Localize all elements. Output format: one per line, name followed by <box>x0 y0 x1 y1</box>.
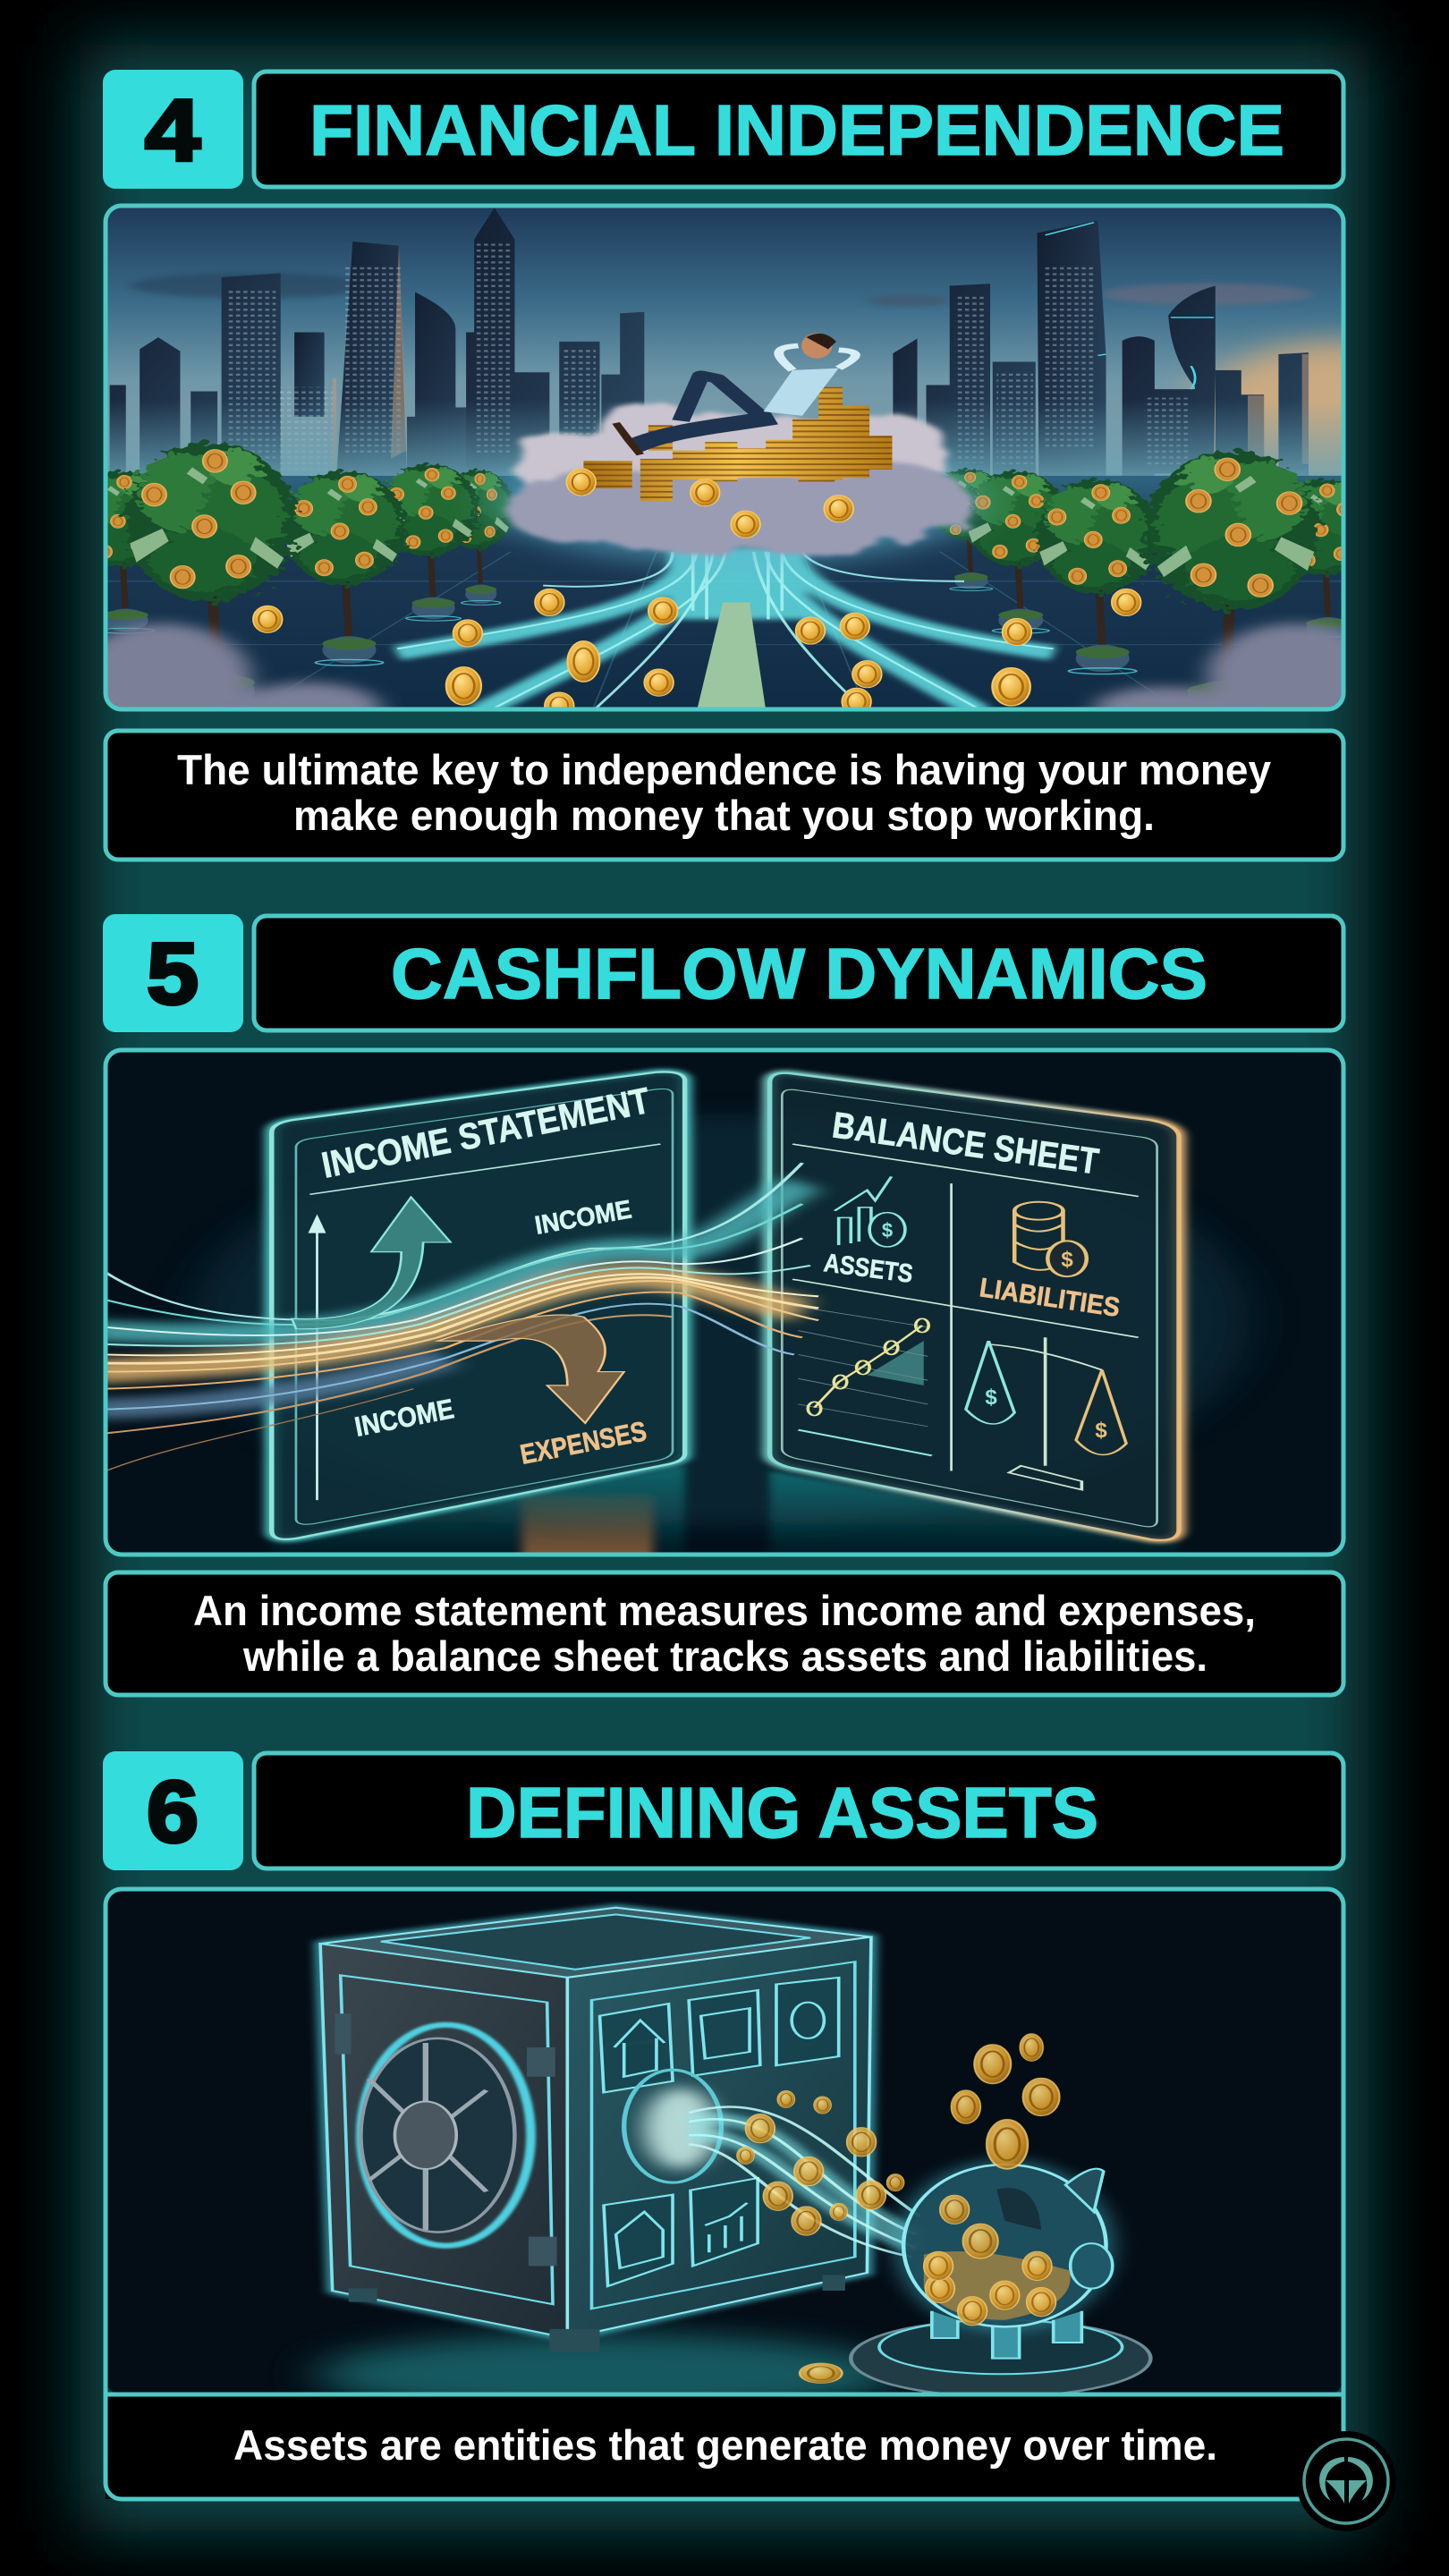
cloud coins <box>566 469 853 538</box>
illustration: transparent safe feeding a piggy bank <box>106 1889 1343 2415</box>
section 4: financial independence <box>71 70 1449 860</box>
backdrop glow <box>195 1115 1248 1526</box>
illustration: income statement and balance sheet panels <box>89 1050 1343 1556</box>
caption: section 4: The ultimate key to independence is having your money <box>177 746 1271 793</box>
platform <box>851 2320 1150 2396</box>
warm building edges <box>333 246 1309 476</box>
caption: section 4 <box>106 731 1343 860</box>
frame: illustration border <box>106 1050 1343 1555</box>
caption: section 6: Assets are entities that generate money over time. <box>233 2421 1217 2469</box>
cloud <box>495 402 980 564</box>
icon: house <box>600 2004 673 2092</box>
icon: assets chart with coin <box>835 1176 905 1247</box>
sky <box>89 201 1449 527</box>
heading: defining assets: DEFINING ASSETS <box>466 1773 1098 1852</box>
dollar bill stream <box>697 602 766 710</box>
city skyline <box>110 208 1309 480</box>
icon: certificate <box>689 1990 760 2076</box>
line chart <box>798 1307 932 1455</box>
caption: section 5: while a balance sheet tracks assets and liabilities. <box>242 1632 1208 1680</box>
panel: income statement <box>272 1072 685 1539</box>
safe door wheel <box>360 2025 531 2246</box>
corner clouds <box>107 616 1342 707</box>
label: income upper: INCOME <box>533 1195 634 1241</box>
money trees <box>71 442 1376 722</box>
label: expenses: EXPENSES <box>518 1415 649 1470</box>
heading: cashflow dynamics: CASHFLOW DYNAMICS <box>391 934 1208 1013</box>
heading: defining assets <box>254 1753 1343 1868</box>
number badge 6 <box>103 1751 243 1870</box>
arrow: income up <box>292 1197 451 1329</box>
number badge 5 <box>103 914 243 1032</box>
label: liabilities: LIABILITIES <box>978 1273 1122 1323</box>
neon accents <box>1046 223 1214 389</box>
caption: section 5: An income statement measures income and expenses, <box>193 1587 1256 1634</box>
relaxing man <box>616 333 855 454</box>
floor glow <box>317 2334 900 2415</box>
dollar sign: assets coin: $ <box>882 1219 893 1241</box>
glowing money streams <box>397 547 1054 712</box>
panel: balance sheet <box>770 1073 1179 1540</box>
ground coins <box>253 589 1140 719</box>
safe <box>320 1908 871 2351</box>
dollar sign: left scale pan: $ <box>985 1385 997 1410</box>
gold coin stacks <box>583 387 892 501</box>
horizon haze <box>107 407 1342 476</box>
dollar sign: right scale pan: $ <box>1095 1419 1107 1443</box>
number badge 5: 5 <box>147 925 199 1022</box>
flowing coins <box>737 2090 904 2235</box>
logo badge <box>1296 2431 1396 2531</box>
heading: financial independence: FINANCIAL INDEPENDENCE <box>309 90 1284 170</box>
flowing cashflow ribbons <box>89 1163 818 1471</box>
caption: section 6 <box>106 2394 1343 2499</box>
frame: illustration and caption border <box>106 1889 1343 2499</box>
floor reflection <box>272 1466 1179 1556</box>
icon: growth chart <box>691 2178 758 2266</box>
energy flow from safe to piggy bank <box>624 2070 919 2257</box>
falling coins <box>800 2034 1059 2384</box>
section 6: defining assets <box>103 1751 1343 2499</box>
icon: liabilities coins <box>1014 1202 1087 1276</box>
label: balance sheet: BALANCE SHEET <box>830 1104 1101 1182</box>
number badge 6: 6 <box>147 1763 199 1860</box>
icon: balance scale <box>966 1337 1126 1490</box>
icon: money house <box>604 2195 673 2286</box>
caption: section 5 <box>106 1572 1343 1695</box>
illustration: man relaxing on a cloud above money trees <box>71 201 1449 733</box>
heading: financial independence <box>254 72 1343 187</box>
city lit windows <box>227 243 1191 476</box>
frame: illustration border <box>106 206 1343 709</box>
caption: section 4: make enough money that you stop working. <box>293 792 1155 839</box>
label: assets: ASSETS <box>822 1249 914 1289</box>
section 5: cashflow dynamics <box>89 914 1343 1695</box>
icon: light bulb <box>776 1978 839 2065</box>
dollar sign: liabilities coin: $ <box>1061 1248 1073 1272</box>
arrow: expenses down <box>437 1315 624 1423</box>
label: income lower: INCOME <box>352 1393 456 1443</box>
piggy bank <box>895 2160 1114 2359</box>
heading: cashflow dynamics <box>254 916 1343 1030</box>
asset icons on the safe <box>600 1978 839 2286</box>
number badge 4: 4 <box>145 81 200 179</box>
label: income statement: INCOME STATEMENT <box>318 1080 653 1186</box>
ground <box>89 476 1360 716</box>
number badge 4 <box>103 70 243 189</box>
